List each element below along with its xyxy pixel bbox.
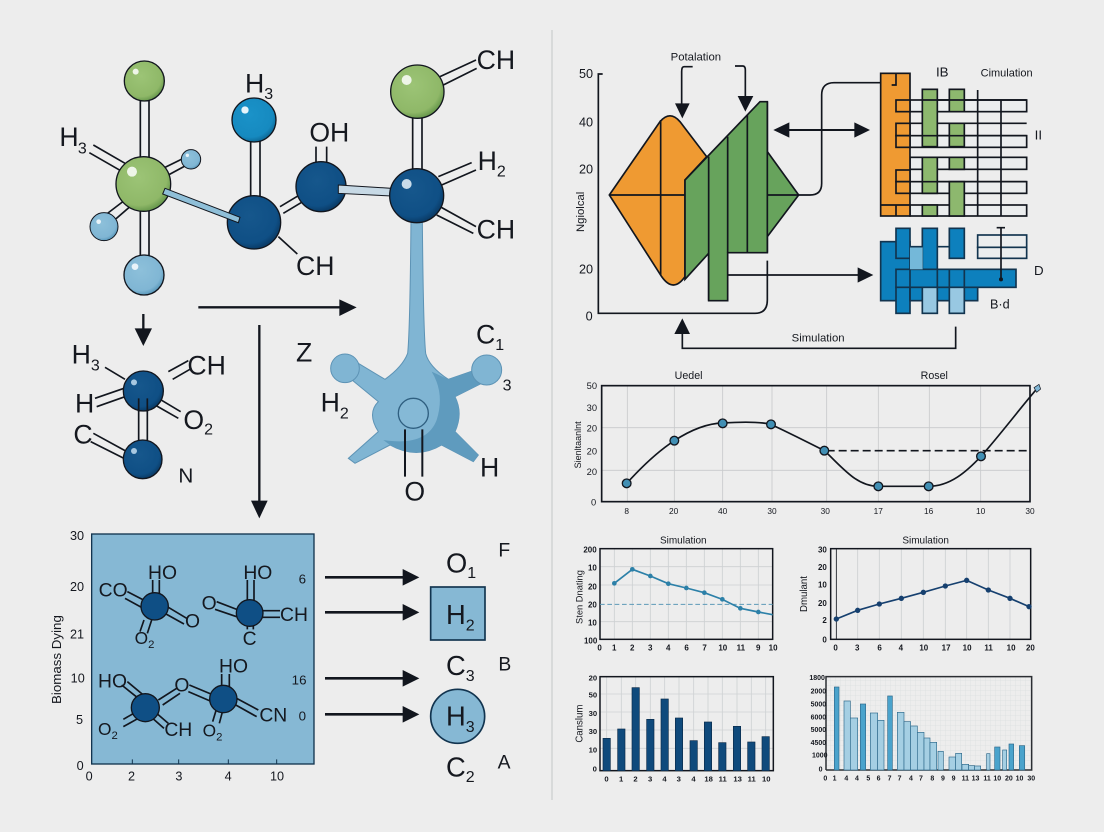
labels: small line chart left: 11 [737, 644, 746, 653]
product: H3 circle: H [446, 700, 466, 731]
labels: small line chart right: 6 [877, 644, 882, 653]
chart: blue square with molecules: C [243, 629, 257, 650]
labels: wide line chart: 8 [624, 506, 629, 516]
labels: flow diagram: 40 [579, 115, 593, 129]
axis labels: biomass chart: 4 [225, 770, 232, 784]
labels: dark bar chart: 18 [704, 775, 714, 784]
labels: small line chart right [799, 535, 1035, 653]
labels: wide line chart: 30 [587, 403, 597, 413]
labels: light histogram: 4 [844, 776, 848, 783]
labels: small line chart left: 10 [588, 618, 597, 627]
grid: orange and green block [881, 73, 1027, 216]
arrow: right [198, 299, 357, 316]
line series [834, 578, 1032, 622]
chart: blue square with molecules: O [174, 676, 189, 697]
labels: wide line chart: 20 [587, 424, 597, 434]
atom: green top [124, 61, 164, 101]
labels: molecule atoms: CH [477, 45, 515, 75]
bond: light link [163, 185, 392, 223]
chart: small line chart left [574, 535, 778, 653]
labels: light histogram: 5 [866, 776, 870, 783]
atom: light blue small [181, 150, 201, 169]
arrows: to products [325, 569, 419, 723]
labels: small line chart left: 0 [597, 644, 602, 653]
molecule: main chain [89, 60, 502, 477]
labels: small line chart right: 20 [818, 563, 827, 572]
labels: molecule atoms: 3 [503, 378, 512, 395]
labels: molecule atoms: H [321, 388, 340, 418]
atom: dark top right [390, 169, 444, 223]
labels: small line chart right: 10 [1007, 644, 1016, 653]
labels: small line chart left: 2 [630, 644, 635, 653]
chart: blue square with molecules: CO [99, 581, 128, 602]
plot frame and grid [826, 677, 1032, 770]
product: H2 square: H [446, 599, 466, 630]
labels: wide line chart: Uedel [675, 370, 703, 382]
arrow: double headed [773, 122, 870, 138]
labels: products: B [498, 655, 511, 676]
labels: small line chart left: 7 [702, 644, 707, 653]
labels: light histogram: 11 [983, 776, 991, 783]
labels: light histogram: 5000 [811, 727, 826, 734]
labels: molecule atoms: H [478, 146, 497, 176]
labels: light histogram: 6000 [811, 714, 826, 721]
chart: blue square with molecules: O [135, 628, 148, 648]
labels: dark bar chart: 30 [589, 727, 597, 736]
chart: light histogram [809, 675, 1035, 783]
panel: biomass drying chart and products [49, 529, 511, 786]
labels: wide line chart [573, 370, 1035, 516]
labels: dark bar chart: 4 [691, 775, 696, 784]
labels: flow diagram: 20 [579, 263, 593, 277]
labels: flow diagram: Simulation [792, 332, 845, 344]
chart: blue square with molecules [92, 534, 314, 764]
atom: green centre [116, 157, 171, 211]
labels: small line chart left: 9 [756, 644, 761, 653]
plot frame and grid [600, 549, 773, 639]
chart: wide line chart [573, 370, 1041, 516]
product: H2 square: 2 [466, 618, 475, 635]
grid: blue block [881, 227, 1027, 313]
atom: green top right [391, 65, 444, 118]
atom: dark right [296, 162, 346, 212]
labels: small line chart right: Simulation [902, 535, 949, 546]
chart: blue square with molecules: 2 [216, 732, 222, 744]
chart: blue square with molecules: CN [259, 706, 287, 727]
labels: dark bar chart [574, 674, 771, 784]
labels: molecule atoms: 2 [497, 164, 506, 181]
labels: molecule atoms: H [245, 68, 264, 98]
chart: small line chart right [799, 535, 1035, 653]
labels: products: C [446, 650, 466, 681]
axis labels: biomass chart: 3 [175, 770, 182, 784]
labels: small line chart right: 11 [984, 644, 993, 653]
labels: light histogram: 1000 [812, 753, 828, 760]
connector: diamond to grid [799, 83, 881, 195]
axis labels: biomass chart: 20 [70, 580, 84, 594]
labels: light histogram: 1800 [809, 675, 825, 682]
arrow: simulation feedback [674, 318, 956, 348]
axis labels: biomass chart: 5 [76, 713, 83, 727]
labels: wide line chart: 30 [821, 506, 830, 516]
labels: products: A [498, 752, 511, 773]
chart: blue square with molecules: O [98, 719, 111, 739]
atom: dark centre [227, 196, 281, 249]
labels: flow diagram: B·d [990, 297, 1010, 311]
axis labels: biomass chart: 30 [70, 529, 84, 543]
labels: dark bar chart: 30 [589, 709, 597, 718]
labels: flow diagram: 20 [579, 163, 593, 177]
panel: population simulation flow diagram [575, 51, 1044, 348]
labels: flow diagram: D [1034, 263, 1044, 278]
labels: wide line chart: 16 [924, 506, 934, 516]
plot frame and grid [831, 549, 1031, 639]
labels: light histogram: 2000 [811, 688, 826, 695]
labels: small line chart right: 0 [833, 644, 838, 653]
labels: light histogram: 7 [919, 776, 923, 783]
labels: small line chart right: 0 [822, 636, 827, 645]
labels: small line chart left: Sten Dnating [574, 570, 584, 624]
arrow: to blue grid [728, 267, 873, 283]
labels: light histogram: 4 [855, 776, 859, 783]
blob: light blue star molecule [331, 220, 502, 477]
labels: small line chart right: 17 [942, 644, 951, 653]
labels: molecule atoms: OH [309, 118, 349, 148]
labels: small line chart left: Simulation [660, 535, 707, 546]
labels: dark bar chart: 50 [589, 691, 597, 700]
labels: small line chart right: Dmulant [799, 576, 810, 612]
labels: light histogram: 4 [909, 776, 913, 783]
axis labels: biomass chart: Biomass Dying [49, 615, 64, 704]
labels: molecule atoms [59, 45, 515, 507]
labels: molecule atoms: H [480, 453, 499, 483]
axis labels: biomass chart [49, 529, 284, 784]
labels: small line chart left: 200 [583, 546, 597, 555]
labels: molecule atoms: 3 [91, 358, 100, 375]
labels: dark bar chart: 13 [733, 775, 742, 784]
line series [622, 384, 1041, 491]
labels: flow diagram: Potalation [671, 51, 721, 63]
chart: blue square with molecules: 2 [111, 730, 118, 742]
arrow: population right [735, 66, 753, 112]
chart: dark bar chart [574, 674, 773, 784]
plot frame and grid [602, 386, 1030, 502]
chart: blue square with molecules: 2 [148, 639, 154, 651]
labels: wide line chart: 10 [976, 506, 986, 516]
labels: dark bar chart: 20 [589, 674, 597, 683]
labels: small line chart left: 20 [588, 601, 597, 610]
axis: flow diagram [598, 74, 767, 313]
labels: small line chart right: 4 [899, 644, 904, 653]
axis labels: biomass chart: 10 [270, 770, 284, 784]
labels: wide line chart: 17 [874, 506, 883, 516]
labels: molecule atoms: H [75, 388, 94, 418]
line series [600, 567, 773, 615]
labels: small line chart right: 10 [963, 644, 972, 653]
labels: light histogram: 0 [823, 776, 827, 783]
chart: blue square with molecules: HO [98, 672, 127, 693]
labels: molecule atoms: 3 [78, 140, 87, 157]
labels: light histogram: 9 [941, 776, 945, 783]
labels: light histogram: 0 [819, 767, 823, 774]
labels: wide line chart: 50 [587, 381, 597, 391]
labels: small line chart left: 10 [769, 644, 778, 653]
labels: light histogram: 20 [1005, 776, 1013, 783]
atom: light blue left [90, 213, 118, 241]
labels: light histogram: 13 [972, 776, 980, 783]
labels: wide line chart: 30 [1025, 506, 1035, 516]
labels: light histogram: 10 [993, 776, 1001, 783]
chart: blue square with molecules: 16 [292, 673, 306, 688]
labels: light histogram: 30 [1027, 776, 1035, 783]
labels: molecule atoms: 2 [340, 405, 349, 422]
labels: products: 2 [466, 769, 475, 786]
atom: light blue bottom [124, 255, 164, 295]
labels: light histogram: 4500 [811, 740, 826, 747]
chart: blue square with molecules: 0 [299, 709, 306, 724]
labels: light histogram: 7 [898, 776, 902, 783]
plot frame and grid [600, 677, 773, 771]
chart: blue square with molecules: HO [243, 563, 272, 584]
labels: flow diagram: 0 [586, 309, 593, 323]
labels: small line chart left: 1 [612, 644, 617, 653]
axis labels: biomass chart: 10 [71, 672, 85, 686]
labels: dark bar chart: 0 [593, 765, 597, 774]
labels: molecule atoms: 3 [264, 86, 273, 103]
labels: flow diagram: Cimulation [981, 68, 1033, 80]
labels: products: O [446, 548, 467, 579]
labels: dark bar chart: Canslum [574, 705, 585, 743]
bars [603, 688, 769, 771]
chart: blue square with molecules: O [202, 593, 217, 614]
labels: small line chart right: 10 [919, 644, 929, 653]
labels: wide line chart: 20 [587, 467, 597, 477]
labels: products: 3 [466, 668, 475, 685]
arrow: short down [135, 314, 152, 346]
labels: molecule atoms: CH [187, 350, 226, 380]
labels: light histogram: 1 [833, 776, 837, 783]
chart: blue square with molecules: 6 [299, 571, 306, 586]
bars [834, 687, 1025, 770]
labels: flow diagram [575, 51, 1044, 344]
axis labels: biomass chart: 21 [70, 627, 84, 641]
labels: wide line chart: 30 [767, 506, 777, 516]
labels: light histogram: 11 [962, 776, 969, 783]
arrow: population left [675, 67, 693, 118]
labels: wide line chart: Rosel [921, 370, 948, 382]
chart: blue square with molecules: CH [164, 720, 192, 741]
labels: small line chart left: 10 [588, 564, 597, 573]
chart: blue square with molecules: HO [148, 563, 177, 584]
labels: flow diagram: Ngiolcal [575, 192, 587, 232]
labels: small line chart right: 10 [818, 581, 827, 590]
labels: dark bar chart: 10 [762, 775, 771, 784]
labels: wide line chart: 20 [669, 506, 679, 516]
labels: molecule atoms: H [72, 339, 91, 369]
labels: flow diagram: IB [936, 65, 949, 80]
labels: flow diagram: 50 [579, 67, 593, 81]
labels: molecule atoms: CH [477, 214, 515, 244]
labels: dark bar chart: 4 [662, 775, 667, 784]
labels: dark bar chart: 11 [748, 775, 757, 784]
labels: molecule atoms: 2 [204, 421, 213, 438]
labels: dark bar chart: 3 [677, 775, 681, 784]
labels: light histogram: 7 [888, 776, 892, 783]
labels: small line chart left: 20 [588, 582, 597, 591]
panel: molecular structures [59, 45, 515, 518]
labels: molecule atoms: Z [296, 338, 312, 368]
labels: dark bar chart: 10 [589, 746, 597, 755]
labels: wide line chart: 40 [718, 506, 728, 516]
labels: products [446, 541, 511, 786]
axis labels: biomass chart: 2 [128, 770, 135, 784]
labels: products: C [446, 752, 466, 783]
labels: molecule atoms: C [73, 419, 93, 449]
labels: light histogram: 5000 [811, 701, 826, 708]
labels: small line chart left: 3 [648, 644, 653, 653]
labels: small line chart right: 20 [818, 599, 827, 608]
labels: small line chart right: 2 [822, 616, 827, 625]
labels: light histogram: 8 [930, 776, 934, 783]
labels: molecule atoms: H [59, 122, 79, 152]
shape: orange diamond [609, 116, 707, 285]
labels: small line chart left: 4 [666, 644, 671, 653]
chart: blue square with molecules: O [203, 721, 216, 741]
chart: blue square with molecules: O [185, 611, 200, 632]
labels: small line chart right: 3 [855, 644, 860, 653]
labels: light histogram: 6 [877, 776, 881, 783]
labels: wide line chart: 20 [587, 446, 597, 456]
atom: blue top [232, 98, 276, 142]
labels: flow diagram: II [1035, 127, 1042, 142]
labels: molecule atoms: CH [296, 251, 335, 281]
labels: dark bar chart: 2 [633, 775, 638, 784]
product: H2 square [431, 587, 485, 640]
labels: molecule atoms: C [476, 319, 495, 349]
molecule: lower left [91, 361, 192, 479]
labels: molecule atoms: 1 [495, 337, 504, 354]
shape: green stepped form [685, 102, 799, 301]
labels: dark bar chart: 3 [648, 775, 652, 784]
labels: dark bar chart: 1 [619, 775, 624, 784]
labels: light histogram: 9 [952, 776, 956, 783]
labels: light histogram: 10 [1016, 776, 1024, 783]
axis labels: biomass chart: 0 [86, 770, 93, 784]
labels: small line chart right: 30 [818, 546, 827, 555]
labels: molecule atoms: N [178, 464, 193, 487]
labels: dark bar chart: 0 [604, 775, 609, 784]
labels: small line chart left: 10 [718, 644, 728, 653]
labels: wide line chart: 0 [591, 498, 596, 508]
axis labels: biomass chart: 0 [77, 759, 84, 773]
labels: products: F [498, 541, 510, 562]
labels: wide line chart: Sienltaanlnt [573, 421, 583, 468]
arrow: long down [251, 325, 268, 518]
labels: molecule atoms: O [404, 477, 425, 507]
labels: dark bar chart: 11 [719, 775, 728, 784]
labels: small line chart left [574, 535, 778, 653]
chart: blue square with molecules: HO [219, 656, 248, 677]
labels: molecule atoms: O [183, 405, 204, 435]
labels: products: 1 [467, 565, 476, 582]
labels: small line chart right: 20 [1026, 644, 1035, 653]
labels: light histogram [809, 675, 1035, 783]
labels: small line chart left: 6 [684, 644, 689, 653]
chart: blue square with molecules: CH [280, 605, 308, 626]
product: H3 circle: 3 [466, 719, 475, 736]
labels: small line chart left: 100 [584, 636, 598, 645]
product: H3 circle [431, 689, 485, 743]
